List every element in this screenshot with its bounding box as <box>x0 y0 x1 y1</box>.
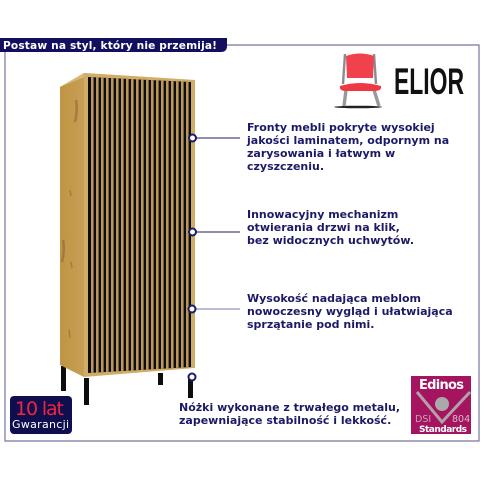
wardrobe front <box>84 73 195 377</box>
icon: red chair <box>334 54 382 108</box>
text: click mechanism: Innowacyjny mechanizm <box>247 208 398 221</box>
text: laminate fronts: jakości laminatem, odpornym na <box>246 134 449 147</box>
text: height <box>247 292 453 331</box>
callout line 1 <box>189 134 240 142</box>
callout line 2 <box>189 228 240 236</box>
frame border <box>5 45 479 441</box>
badge: 10 year warranty <box>10 396 72 434</box>
text: laminate fronts <box>246 121 449 173</box>
wardrobe legs <box>61 366 193 405</box>
badge: Edinos DSI 804 Standards: Edinos <box>419 378 464 393</box>
text: height: Wysokość nadająca meblom <box>247 292 421 305</box>
text: laminate fronts: zarysowania i łatwym w <box>247 147 395 160</box>
header banner: Postaw na styl, który nie przemija! <box>3 40 217 52</box>
callout marker 4 <box>188 374 196 380</box>
text: height: nowoczesny wygląd i ułatwiająca <box>247 305 453 318</box>
badge: Edinos DSI 804 Standards: DSI <box>415 414 431 425</box>
text: click mechanism: bez widocznych uchwytów. <box>247 234 414 247</box>
text: click mechanism: otwierania drzwi na klik, <box>247 221 400 234</box>
badge: 10 year warranty: Gwarancji <box>12 418 69 431</box>
text: height: sprzątanie pod nimi. <box>247 318 374 331</box>
text: metal legs: zapewniające stabilność i lekkość. <box>179 414 391 427</box>
badge: Edinos DSI 804 Standards: 804 <box>452 414 470 425</box>
text: metal legs: Nóżki wykonane z trwałego metalu, <box>179 401 400 414</box>
text: click mechanism <box>247 208 414 247</box>
badge: Edinos DSI 804 Standards: Standards <box>419 425 467 435</box>
text: metal legs <box>179 401 400 427</box>
text: laminate fronts: czyszczeniu. <box>247 160 324 173</box>
wardrobe wood grain <box>62 100 77 338</box>
brand name: ELIOR <box>394 60 464 102</box>
badge: 10 year warranty: 10 lat <box>15 398 64 420</box>
brand logo: Elior <box>334 54 464 108</box>
wardrobe side panel <box>60 73 84 377</box>
wardrobe top <box>60 73 195 87</box>
text: laminate fronts: Fronty mebli pokryte wysokiej <box>247 121 435 134</box>
callout line 3 <box>188 306 240 312</box>
wardrobe slats <box>88 70 191 380</box>
badge: Edinos DSI 804 Standards <box>411 376 471 435</box>
wardrobe illustration <box>60 70 195 405</box>
